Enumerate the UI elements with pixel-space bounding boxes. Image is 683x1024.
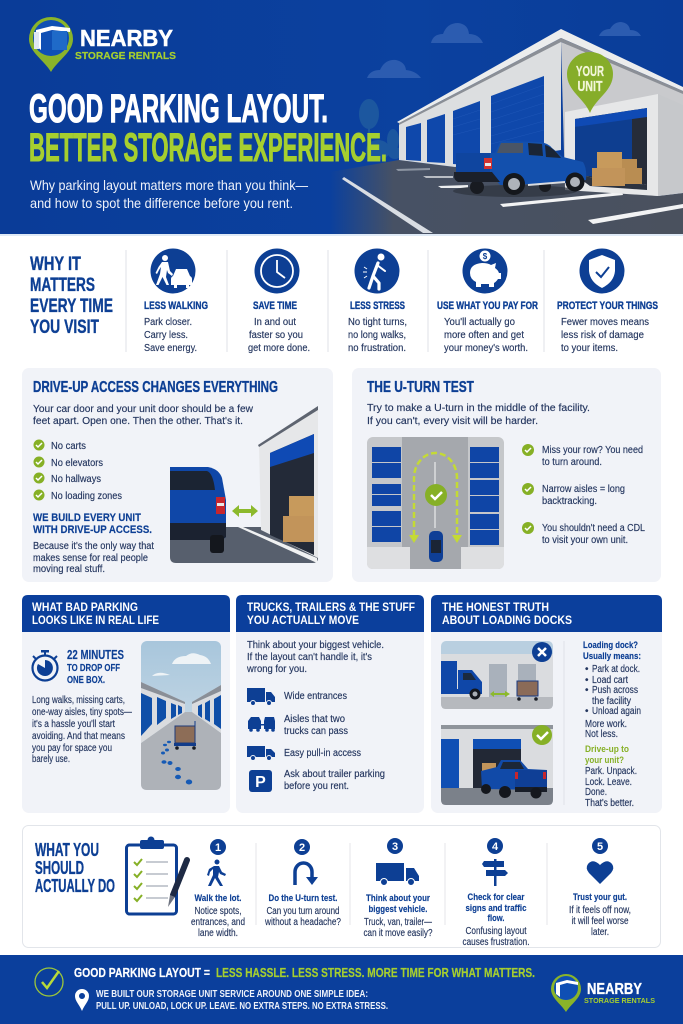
your unit pin: UNIT [578,78,602,95]
panel: drive-up access [22,368,333,582]
benefit: save time: In and out [254,317,296,328]
u-turn points: You shouldn't need a CDL [542,523,645,534]
drive-up statement [33,512,154,575]
step 5: it will feel worse [572,916,629,927]
u-turn points: to visit your own unit. [542,535,628,546]
step 4 [462,838,530,948]
u-turn points: backtracking. [542,496,597,507]
step 3: biggest vehicle. [368,904,428,915]
step 2 [264,839,341,928]
loading dock text: Push across [592,685,638,696]
logo [29,17,176,72]
cart [174,721,196,750]
item: easy pull-in [247,746,361,760]
loading dock text: Unload again [592,706,641,717]
icon: footer location pin [75,989,89,1011]
subtitle: and how to spot the difference before you rent. [30,195,293,211]
step 2: Do the U-turn test. [268,893,338,904]
step 5: Trust your gut. [573,892,627,903]
trucks header [236,595,424,632]
u-turn points: Narrow aisles = long [542,484,625,495]
title: BETTER STORAGE EXPERIENCE. [29,126,387,170]
u-turn diagram [367,437,504,569]
what you should do heading: SHOULD [35,858,84,878]
logo: STORAGE RENTALS [75,50,176,62]
item: two trucks pass [248,714,348,737]
item: trailer parking: before you rent. [284,781,349,792]
step 3: 3 [392,841,398,853]
icon: clipboard and pen [126,836,187,914]
benefit: less stress [348,248,407,354]
step 3: Truck, van, trailer— [364,917,432,928]
panel: bad parking [22,595,230,813]
why it matters heading: MATTERS [30,275,95,296]
loading docks header: ABOUT LOADING DOCKS [442,615,572,627]
your unit pin: YOUR [576,63,604,80]
footer slogan: GOOD PARKING LAYOUT = [74,965,210,980]
header panel [0,0,683,236]
step 2: without a headache? [264,917,341,928]
check badge [532,725,552,745]
step 4: Confusing layout [466,926,527,937]
x badge [532,642,552,662]
loading docks header [431,595,662,632]
benefit: protect your things: less risk of damage [561,330,644,341]
item: trailer parking: P [255,774,266,791]
step 4: flow. [488,913,504,924]
step 2: Can you turn around [266,906,340,917]
footer logo: NEARBY [587,981,642,998]
footer band [0,955,683,1024]
illustration: drive-up pickup [441,725,553,805]
u-turn points: to turn around. [542,457,602,468]
title [29,87,387,170]
panel: what you should do [22,826,660,948]
trees behind building [359,99,402,160]
drive-up statement: Because it's the only way that [33,541,154,552]
trucks header: TRUCKS, TRAILERS & THE STUFF [247,602,415,614]
bad parking body [32,695,132,765]
loading dock text: Park. Unpack. [585,766,637,777]
bad parking body: one-way aisles, tiny spots— [32,707,132,718]
illustration: long storage corridor [141,641,221,790]
benefit: use what you pay for: $ [483,252,488,261]
loading dock text [583,640,641,809]
step 4: signs and traffic [466,903,526,914]
what you should do heading [35,840,115,896]
step 4: causes frustration. [462,937,530,948]
step 3: Think about your [366,893,430,904]
item: easy pull-in: Easy pull-in access [284,748,361,759]
step 5: later. [591,927,609,938]
drive-up statement: moving real stuff. [33,564,105,575]
benefit: less stress: no long walks, [348,330,406,341]
step 5 [569,838,631,938]
loading dock text: Done. [585,787,607,798]
footer message [96,989,388,1012]
loading dock text: Park at dock. [592,664,640,675]
icon: footer check [35,968,63,996]
benefit: use what you pay for [437,248,538,354]
loading dock text: • [585,685,589,696]
why it matters heading [30,254,113,338]
loading dock text: • [585,675,589,686]
storage building [397,29,683,196]
trucks header: YOU ACTUALLY MOVE [247,615,359,627]
subtitle: Why parking layout matters more than you think— [30,177,308,193]
footer logo [551,974,655,1012]
your unit pin [567,52,613,113]
loading dock text: That's better. [585,798,634,809]
footer slogan: LESS HASSLE. LESS STRESS. MORE TIME FOR WHAT MATTERS. [216,965,535,980]
drive-up intro: feet apart. Open one. Then the other. That's it. [33,416,243,427]
benefit: less stress: LESS STRESS [350,300,405,312]
footer logo: STORAGE RENTALS [584,998,655,1005]
benefit: use what you pay for: more often and get [444,330,524,341]
loading dock text: the facility [592,696,631,707]
benefit: use what you pay for: USE WHAT YOU PAY FOR [437,300,538,312]
icon: stopwatch [32,650,58,680]
drive-up statement: WITH DRIVE-UP ACCESS. [33,524,152,536]
benefit: less stress: No tight turns, [348,317,407,328]
step 2: 2 [299,842,305,854]
stat: 22 minutes: 22 MINUTES [67,647,124,662]
step 3: can it move easily? [364,928,433,939]
cardboard boxes [592,152,642,186]
trucks intro: If the layout can't handle it, it's [247,652,372,663]
drive-up checklist: No loading zones [51,491,122,502]
item: wide entrances: Wide entrances [284,691,347,702]
footer message: PULL UP. UNLOAD, LOCK UP. LEAVE. NO EXTRA STEPS. NO EXTRA STRESS. [96,1001,388,1012]
u-turn path [414,453,457,536]
u-turn intro [367,403,590,427]
loading dock text: • [585,664,589,675]
stat: 22 minutes: TO DROP OFF [67,663,120,674]
trucks intro: wrong for you. [246,664,307,675]
footer slogan [74,965,535,980]
benefit: less walking: Park closer. [144,317,192,328]
drive-up checklist [34,440,122,502]
why it matters heading: EVERY TIME [30,296,113,317]
step 1: entrances, and [191,917,245,928]
trucks intro: Think about your biggest vehicle. [247,640,384,651]
bad parking header [22,595,230,632]
step 5: 5 [597,841,603,853]
step 1: Notice spots, [194,906,242,917]
why it matters heading: YOU VISIT [30,317,99,338]
pickup truck [453,141,586,197]
benefit: use what you pay for: your money's worth. [444,343,528,354]
stat: 22 minutes: ONE BOX. [67,675,105,686]
logo: NEARBY [80,25,173,51]
benefit: less walking: Save energy. [144,343,197,354]
benefit: save time: get more done. [248,343,310,354]
step 3 [364,838,433,939]
u-turn intro: If you can't, every visit will be harder. [367,416,538,427]
what you should do heading: WHAT YOU [35,840,99,860]
u-turn heading: THE U-TURN TEST [367,379,474,396]
trucks intro [246,640,384,675]
bad parking header: WHAT BAD PARKING [32,602,138,614]
item: wide entrances [247,688,347,706]
bad parking body: avoiding. And that means [32,731,125,742]
drive-up checklist: No carts [51,441,86,452]
clouds [367,22,641,78]
benefit: protect your things: to your items. [561,343,618,354]
step 5: If it feels off now, [569,905,631,916]
drive-up heading: DRIVE-UP ACCESS CHANGES EVERYTHING [33,379,278,396]
parking lot ground [330,160,683,234]
title: GOOD PARKING LAYOUT. [29,87,328,131]
loading dock text: Loading dock? [583,640,638,651]
panel: trucks and trailers [236,595,424,813]
benefit: less stress: no frustration. [348,343,406,354]
what you should do heading: ACTUALLY DO [35,876,115,896]
benefit: save time: faster so you [249,330,303,341]
step 1: Walk the lot. [194,893,242,904]
drive-up statement: makes sense for real people [33,553,148,564]
bad parking body: Long walks, missing carts, [32,695,125,706]
roll-up doors row [406,76,544,166]
loading dock text: Not less. [585,729,618,740]
why it matters heading: WHY IT [30,254,81,275]
loading dock text: your unit? [585,755,624,766]
subtitle [30,177,308,211]
bad parking header: LOOKS LIKE IN REAL LIFE [32,615,159,627]
illustration: car beside unit door [170,406,318,563]
item: two trucks pass: trucks can pass [284,726,348,737]
benefit: less walking: Carry less. [144,330,188,341]
loading dock text: Usually means: [583,651,641,662]
panel: u-turn test [352,368,661,582]
benefit: protect your things: Fewer moves means [561,317,649,328]
step 4: 4 [492,841,499,853]
benefit: save time [248,248,310,354]
green double arrow [232,505,258,517]
benefit: use what you pay for: You'll actually go [444,317,515,328]
item: trailer parking: Ask about trailer parking [284,769,385,780]
u-turn points [522,444,645,546]
why it matters section [30,248,658,354]
item: trailer parking [249,769,385,792]
benefit: less walking: LESS WALKING [144,300,208,312]
benefit: less walking [144,248,208,354]
item: two trucks pass: Aisles that two [284,714,345,725]
footer message: WE BUILT OUR STORAGE UNIT SERVICE AROUND ONE SIMPLE IDEA: [96,989,368,1000]
footprints [161,741,192,784]
loading dock text: Load cart [592,675,628,686]
benefit: protect your things [557,248,658,354]
loading dock text: Drive-up to [585,744,629,755]
step 1: 1 [215,842,221,854]
loading dock text: More work. [585,719,627,730]
drive-up checklist: No hallways [51,474,101,485]
bad parking body: barely use. [32,754,70,765]
drive-up intro [33,404,254,427]
drive-up checklist: No elevators [51,458,103,469]
benefit: save time: SAVE TIME [253,300,297,312]
step 1: lane width. [198,928,238,939]
drive-up statement: WE BUILD EVERY UNIT [33,512,141,524]
illustration: loading dock [441,641,553,709]
u-turn intro: Try to make a U-turn in the middle of the facility. [367,403,590,414]
loading dock text: • [585,706,589,717]
drive-up intro: Your car door and your unit door should be a few [33,404,254,415]
stat: 22 minutes [67,647,124,686]
end unit frame [565,94,658,196]
step 4: Check for clear [468,892,525,903]
bad parking body: it's a hassle you'll start [32,719,115,730]
step 1 [191,839,245,939]
panel: loading docks [431,595,662,813]
bad parking body: you pay for space you [32,743,112,754]
loading dock text: Lock. Leave. [585,777,632,788]
loading docks header: THE HONEST TRUTH [442,602,549,614]
u-turn points: Miss your row? You need [542,445,643,456]
